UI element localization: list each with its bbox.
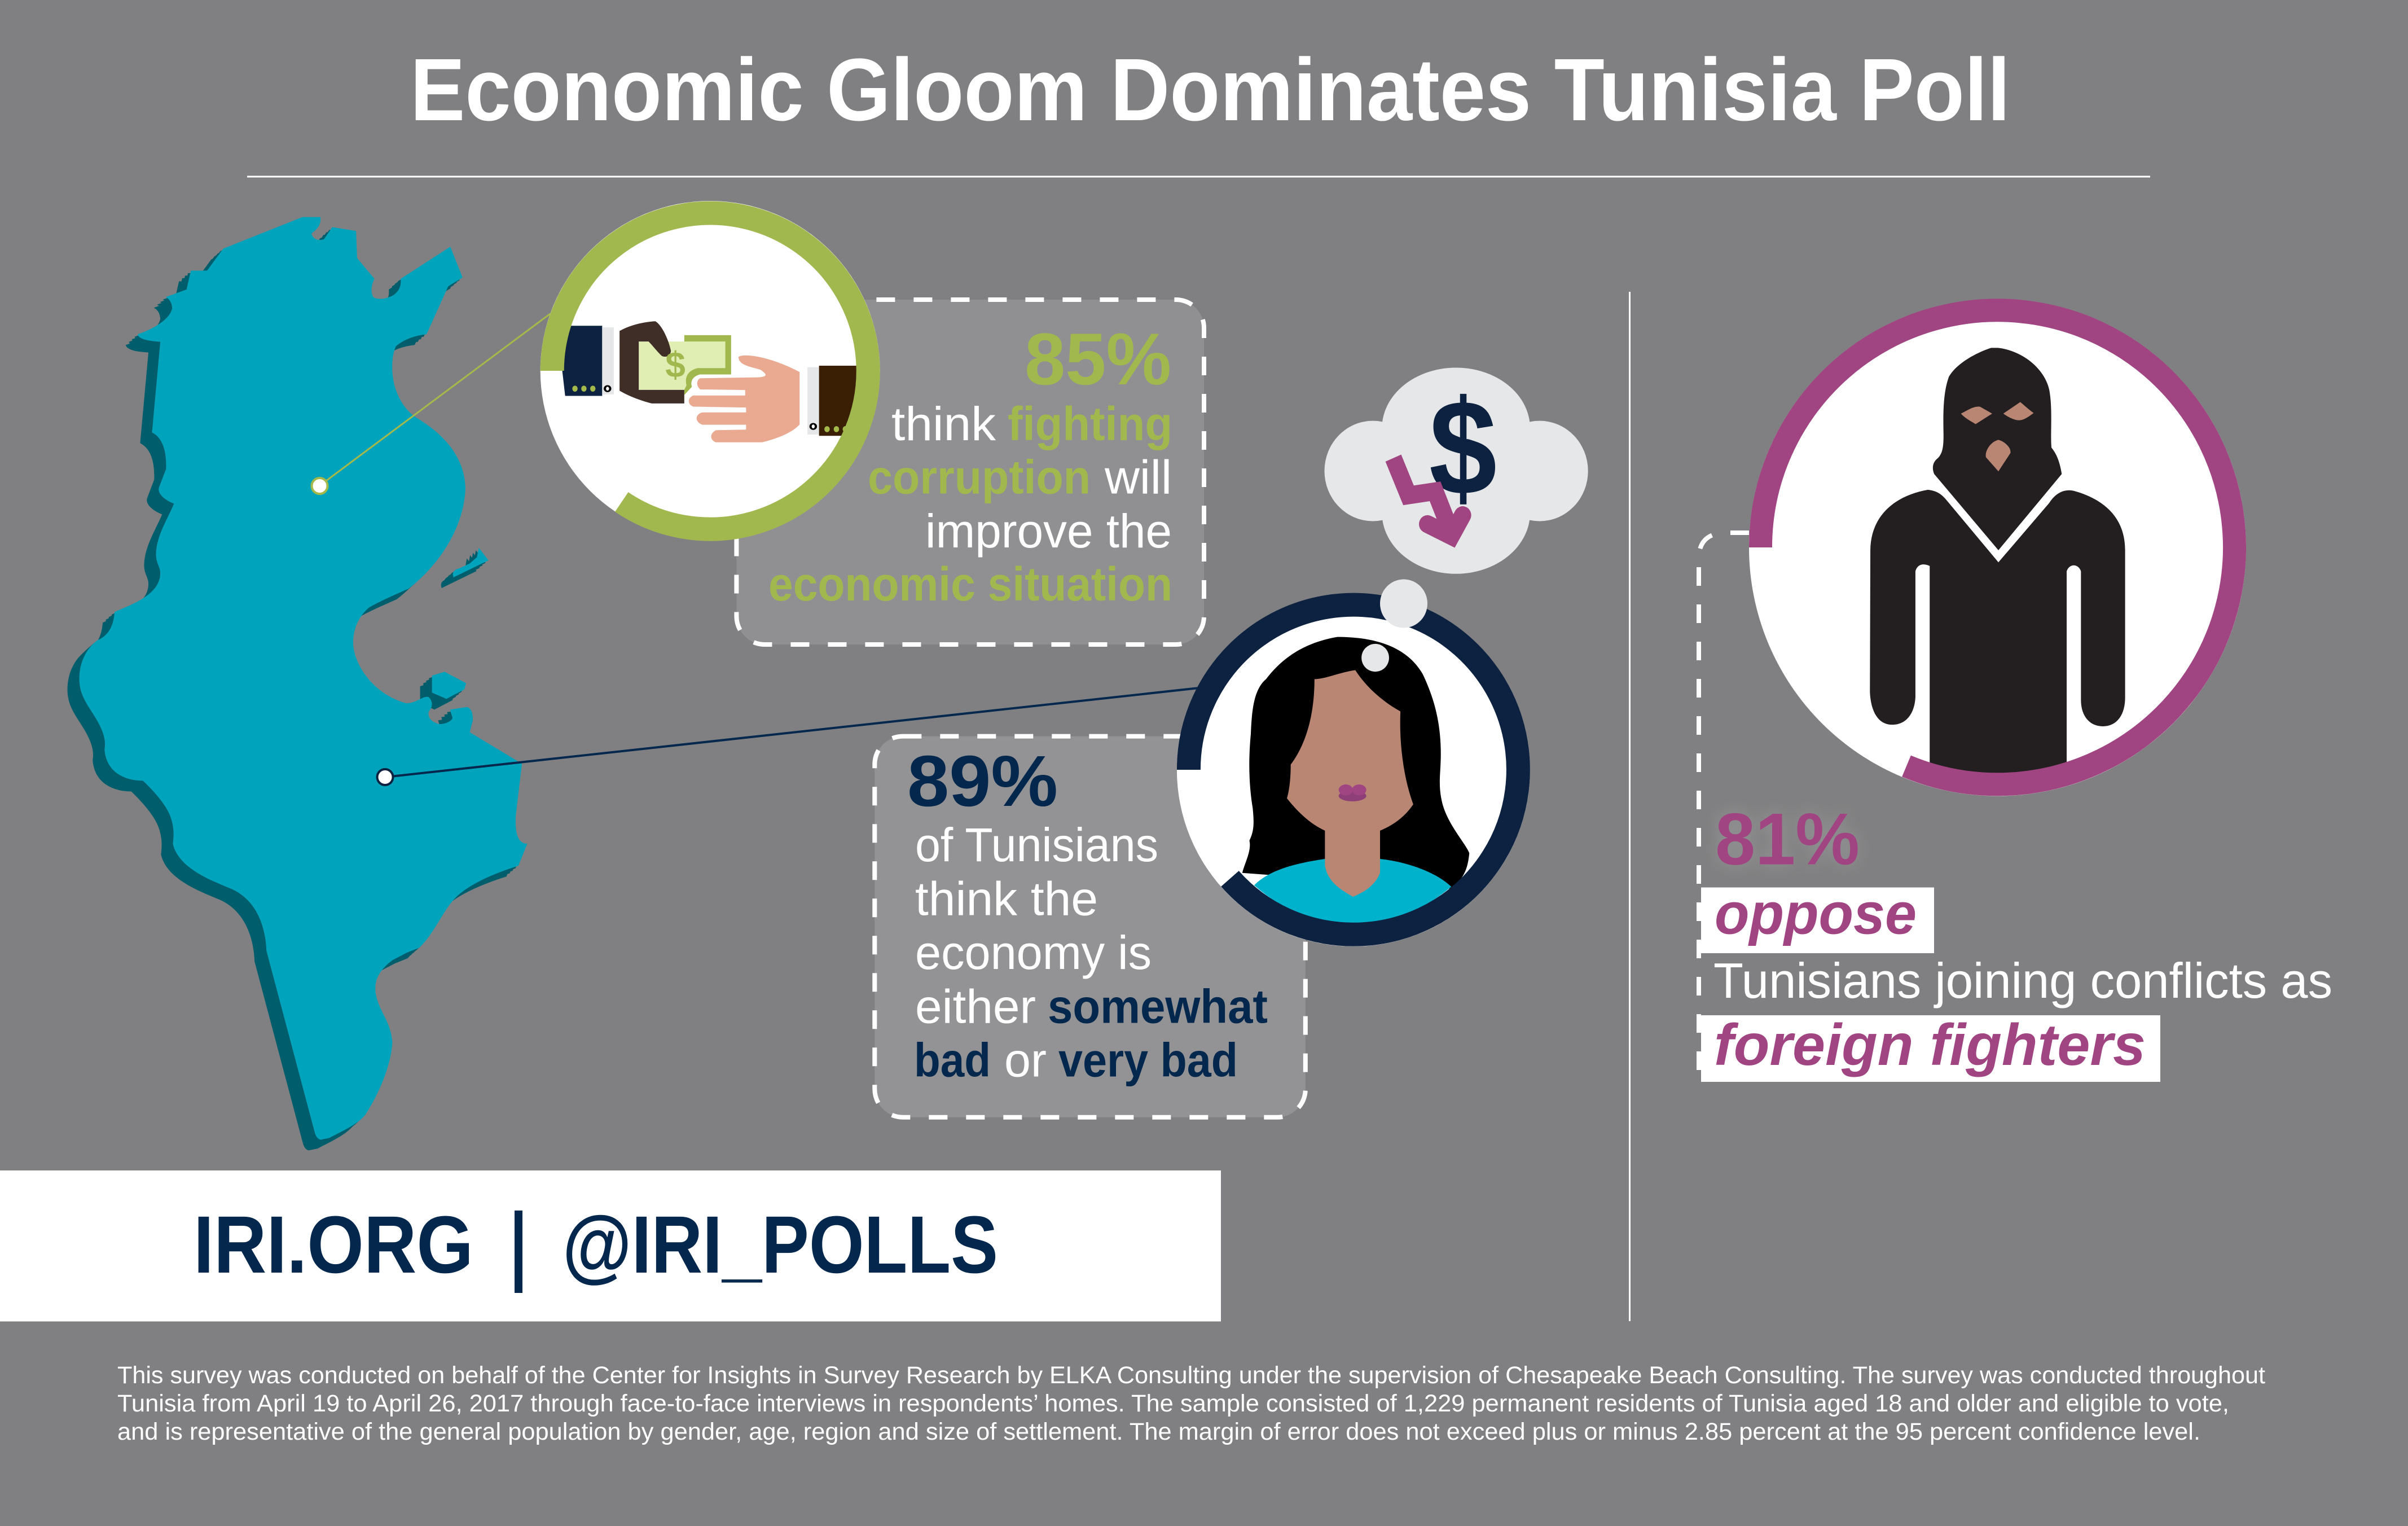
text: think fighting corruption will improve the economic situation: corruption bbox=[868, 450, 1091, 503]
stat: 85%: 85% bbox=[1025, 318, 1171, 400]
icon: dollar sign on banknote: $ bbox=[665, 344, 686, 385]
icon: hands and banknote bbox=[557, 321, 863, 443]
icon: dollar sign: $ bbox=[1429, 372, 1497, 524]
text: of Tunisians think the economy is either somewhat bad or very bad: think the bbox=[915, 872, 1098, 926]
icon: masked figure bbox=[1870, 348, 2125, 778]
panel: economy callout bbox=[875, 736, 1306, 1117]
progress ring: navy bbox=[1189, 605, 1518, 935]
stat: 81%: 81% bbox=[1715, 798, 1860, 880]
text: think fighting corruption will improve the economic situation: will bbox=[1104, 450, 1172, 503]
text: of Tunisians think the economy is either somewhat bad or very bad: or bbox=[1004, 1034, 1047, 1087]
icon: down arrow bbox=[1394, 458, 1462, 536]
icon: woman portrait bbox=[1242, 637, 1469, 930]
text: of Tunisians think the economy is either somewhat bad or very bad: bad bbox=[914, 1034, 991, 1087]
banner: IRI links bbox=[0, 1170, 1221, 1322]
highlight: oppose: oppose bbox=[1715, 882, 1917, 947]
text: of Tunisians think the economy is either somewhat bad or very bad: either bbox=[915, 980, 1036, 1033]
text: of Tunisians think the economy is either somewhat bad or very bad: of Tunisians bbox=[915, 818, 1158, 871]
panel: corruption callout bbox=[736, 300, 1204, 644]
text: of Tunisians think the economy is either somewhat bad or very bad: economy is bbox=[915, 926, 1152, 979]
footnote: survey methodology bbox=[117, 1362, 2265, 1445]
dashed connector: foreign fighters bbox=[1699, 533, 1749, 1081]
connector line: green bbox=[319, 314, 550, 486]
connector line: navy bbox=[385, 688, 1199, 777]
cloud shape bbox=[1324, 367, 1588, 574]
panel: foreign fighters text bbox=[1701, 798, 2332, 1082]
icon: woman circle bbox=[1177, 579, 1530, 946]
text: think fighting corruption will improve the economic situation bbox=[768, 397, 1172, 611]
text: think fighting corruption will improve the economic situation: improve the bbox=[925, 505, 1172, 558]
footnote: survey methodology: This survey was conducted on behalf of the Center for Insights in Survey Research by ELKA Consulting under the supervision of Chesapeake Beach Consulting. The survey was conducted throughout bbox=[117, 1362, 2265, 1389]
text: of Tunisians think the economy is either somewhat bad or very bad: somewhat bbox=[1048, 980, 1268, 1033]
map marker: navy bbox=[377, 769, 393, 785]
text: think fighting corruption will improve the economic situation: fighting bbox=[1008, 397, 1172, 450]
text: Tunisians joining conflicts as: Tunisians joining conflicts as bbox=[1713, 953, 2332, 1008]
stat: 89%: 89% bbox=[907, 741, 1058, 822]
icon: corruption circle with hands exchanging money bbox=[541, 201, 880, 541]
icon: thought cloud with falling dollar bbox=[1324, 367, 1588, 574]
text: think fighting corruption will improve the economic situation: think bbox=[891, 397, 996, 450]
thought bubble: small bbox=[1380, 579, 1427, 628]
footnote: survey methodology: Tunisia from April 19 to April 26, 2017 through face-to-face interviews in respondents’ homes. The sample consisted of 1,229 permanent residents of Tunisia aged 18 and older and eligible to vote, bbox=[117, 1390, 2229, 1417]
highlight: foreign fighters: foreign fighters bbox=[1714, 1012, 2146, 1078]
map of Tunisia bbox=[67, 217, 528, 1151]
banner: IRI links: IRI.ORG bbox=[194, 1199, 473, 1290]
progress ring: purple bbox=[1760, 310, 2234, 784]
text: think fighting corruption will improve the economic situation: economic situation bbox=[768, 558, 1172, 611]
icon: masked fighter circle bbox=[1749, 299, 2246, 796]
footnote: survey methodology: and is representative of the general population by gender, age, region and size of settlement. The margin of error does not exceed plus or minus 2.85 percent at the 95 percent confidence level. bbox=[117, 1418, 2200, 1445]
map marker: green bbox=[311, 478, 327, 494]
text: of Tunisians think the economy is either somewhat bad or very bad bbox=[914, 818, 1268, 1087]
text: of Tunisians think the economy is either somewhat bad or very bad: very bad bbox=[1058, 1034, 1238, 1087]
title: Economic Gloom Dominates Tunisia Poll bbox=[410, 41, 2010, 139]
banner: IRI links: @IRI_POLLS bbox=[563, 1199, 998, 1290]
progress ring: green bbox=[552, 213, 868, 529]
